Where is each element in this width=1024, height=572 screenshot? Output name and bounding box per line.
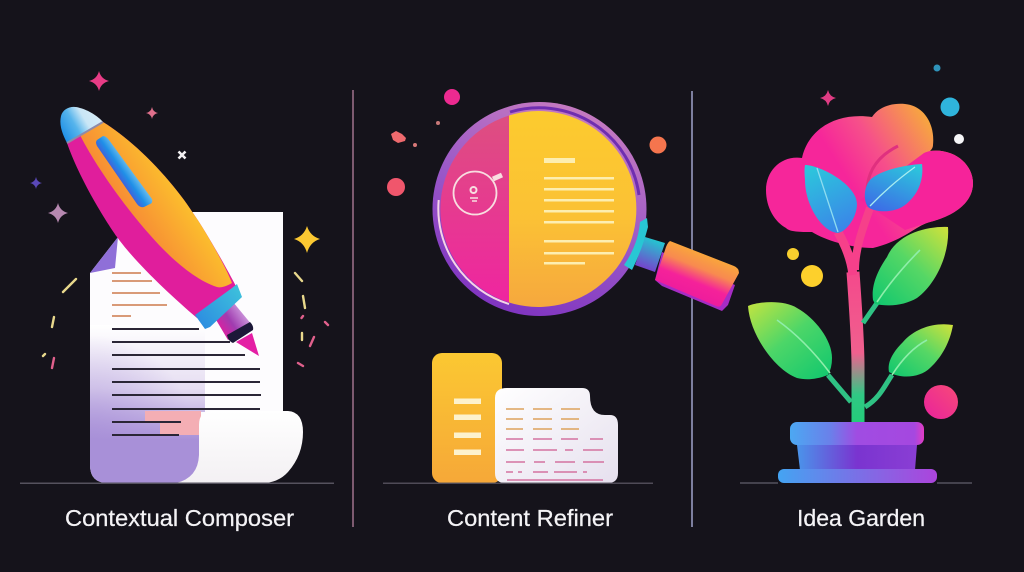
icon: flower cloud xyxy=(766,104,973,248)
divider: right xyxy=(691,91,693,527)
panel: idea garden xyxy=(740,64,973,531)
panel: content refiner xyxy=(383,89,739,531)
lens fill xyxy=(440,116,509,302)
icon: blue leaves xyxy=(804,164,922,233)
label: content refiner: Content Refiner xyxy=(447,505,613,531)
handle collar xyxy=(624,218,648,270)
icon: plant stems xyxy=(828,146,898,422)
handle xyxy=(635,237,665,272)
floating dots xyxy=(787,64,964,419)
fold xyxy=(90,237,118,273)
baseline xyxy=(383,482,653,484)
icon: flower pot xyxy=(778,422,937,483)
icon: yellow folder xyxy=(432,353,502,483)
document page xyxy=(90,212,303,483)
icon: pen xyxy=(60,107,259,356)
icon: refined document xyxy=(495,388,618,483)
floating dots xyxy=(387,89,666,196)
baseline xyxy=(20,482,334,484)
icon: green leaves xyxy=(748,227,953,379)
panel: contextual composer xyxy=(20,71,334,531)
lens rim xyxy=(432,102,646,316)
label: contextual composer: Contextual Composer xyxy=(65,505,294,531)
divider: left xyxy=(352,90,354,527)
text lines: orange xyxy=(112,272,167,317)
label: idea garden: Idea Garden xyxy=(797,505,925,531)
page curl xyxy=(176,411,303,483)
lens text lines xyxy=(544,158,614,264)
icon: magnifying glass xyxy=(432,102,739,316)
baseline xyxy=(740,482,972,484)
mini magnifier icon xyxy=(454,172,502,214)
sparkles and confetti xyxy=(30,71,328,368)
text lines: dark xyxy=(112,328,261,436)
